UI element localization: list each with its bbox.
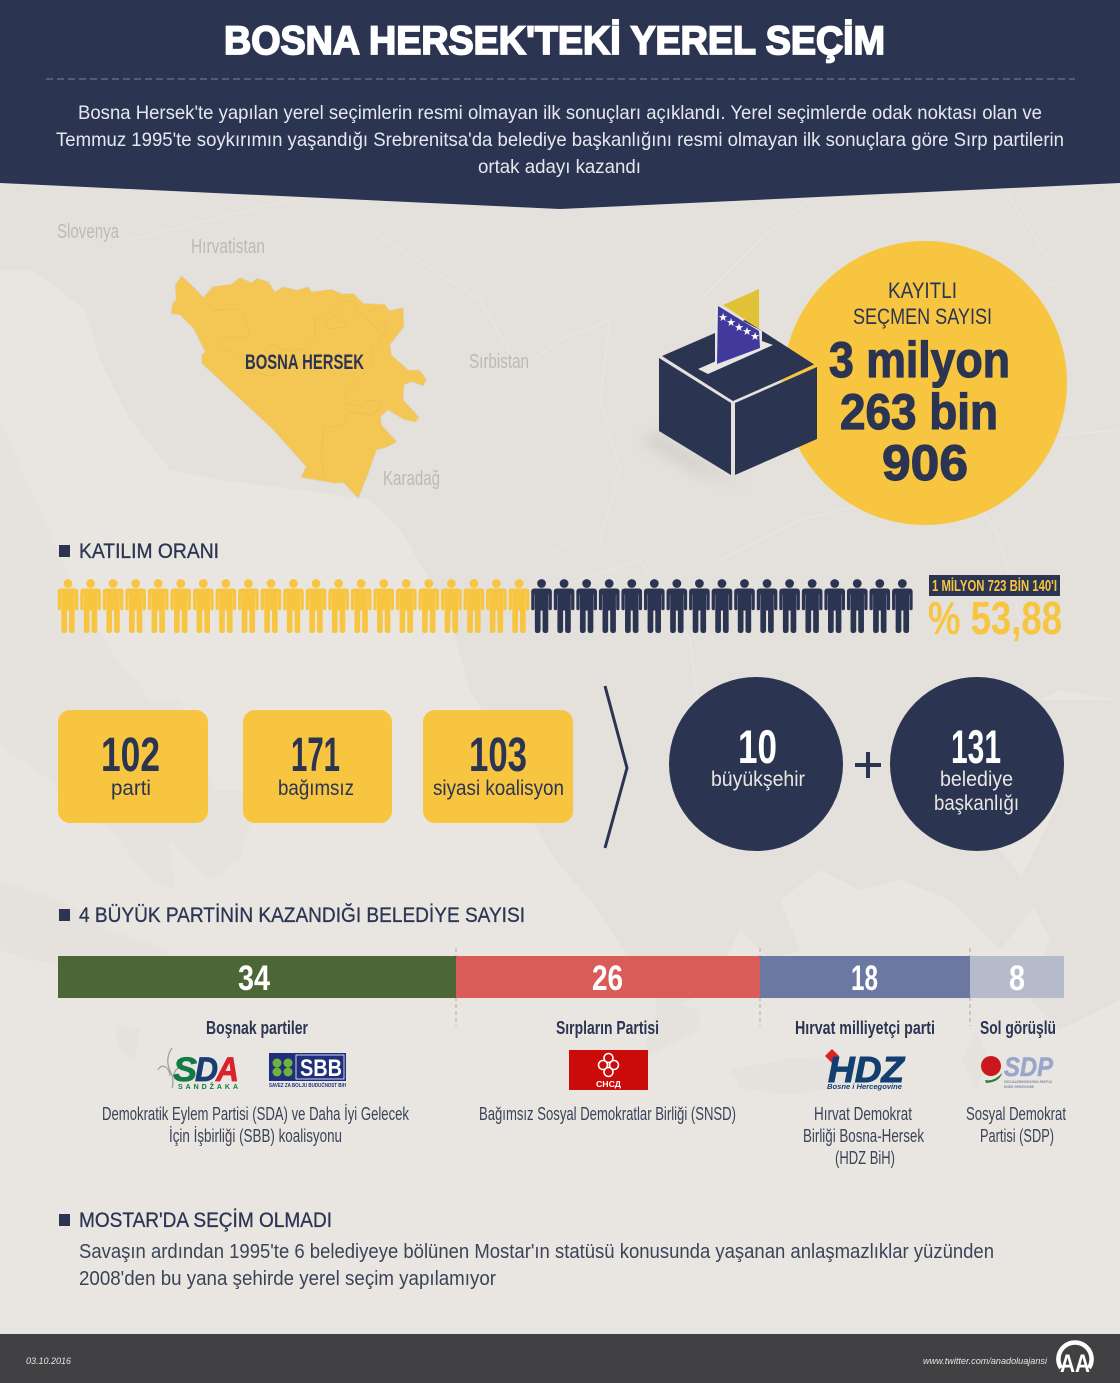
logo: SNSD (569, 1050, 648, 1090)
footer (0, 1334, 1120, 1383)
icon: ballot box: ★ (726, 316, 736, 329)
intro text: Bosna Hersek'te yapılan yerel seçimlerin resmi olmayan ilk sonuçları açıklandı. Yerel seçimlerde odak noktası olan ve (78, 102, 1042, 124)
registered voters circle: 263 bin (840, 384, 998, 440)
logo: SBB (269, 1053, 346, 1089)
logo: SNSD: СНСД (596, 1079, 621, 1089)
registered voters circle: 906 (882, 435, 968, 491)
intro text (56, 102, 1064, 178)
heading: four big parties: 4 BÜYÜK PARTİNİN KAZANDIĞI BELEDİYE SAYISI (79, 904, 525, 927)
logo: SBB: SAVEZ ZA BOLJU BUDUĆNOST BIH (269, 1081, 346, 1089)
party descriptions: Birliği Bosna-Hersek (803, 1126, 925, 1146)
logo: SDP: SDP (1004, 1052, 1054, 1082)
icon: ballot box (640, 289, 817, 488)
registered voters circle: SEÇMEN SAYISI (853, 304, 992, 329)
icon: plus (855, 752, 881, 778)
arrow: chevron (605, 686, 627, 848)
section: Mostar: MOSTAR'DA SEÇİM OLMADI (79, 1209, 332, 1232)
logo: AA: AA (1060, 1350, 1090, 1378)
registered voters circle: KAYITLI (888, 278, 957, 303)
logo: SDA (158, 1048, 239, 1091)
card: parties: parti (111, 777, 151, 800)
card: parties: 102 (101, 729, 160, 782)
card: independents: bağımsız (278, 777, 354, 800)
icon: ballot box: ★ (734, 321, 744, 334)
circle: metropolitan: büyükşehir (711, 768, 805, 791)
neighbour country labels (57, 221, 529, 490)
card: independents: 171 (291, 729, 340, 782)
circle: municipalities: 131 (951, 720, 1001, 773)
pictogram: turnout people (58, 579, 913, 633)
party group headings (206, 1018, 1056, 1038)
registered voters circle (783, 241, 1067, 525)
card: independents (243, 710, 392, 823)
stacked bar chart: 26 (592, 959, 623, 998)
circle: metropolitan: 10 (738, 720, 777, 773)
icon: ballot box: ★ (750, 330, 760, 343)
neighbour country labels: Slovenya (57, 221, 120, 243)
circle: municipalities: başkanlığı (934, 792, 1019, 815)
stacked bar chart: 18 (851, 959, 878, 998)
map label: BOSNA HERSEK (245, 351, 364, 374)
party descriptions (102, 1104, 1066, 1168)
stacked bar chart: 34 (238, 959, 270, 998)
heading: turnout: KATILIM ORANI (79, 540, 219, 563)
card: parties (58, 710, 208, 823)
party descriptions: Partisi (SDP) (980, 1126, 1054, 1146)
section: Mostar: Savaşın ardından 1995'te 6 belediyeye bölünen Mostar'ın statüsü konusunda yaşanan anlaşmazlıklar yüzünden (79, 1241, 994, 1263)
party group headings: Sol görüşlü (980, 1018, 1056, 1038)
stacked bar chart (58, 948, 1064, 1026)
logo: HDZ: Bosne i Hercegovine (827, 1082, 902, 1091)
turnout figure: % 53,88 (928, 592, 1062, 644)
circle: municipalities (890, 677, 1064, 851)
section: Mostar (59, 1209, 994, 1290)
logo: SDP: SOCIJALDEMOKRATSKA PARTIJA (1004, 1079, 1052, 1084)
logo: SBB: SBB (300, 1055, 342, 1082)
logo: SDA: A (215, 1051, 239, 1089)
logo: AA (1058, 1342, 1092, 1378)
turnout figure: 1 MİLYON 723 BİN 140'I (932, 577, 1057, 595)
party descriptions: Demokratik Eylem Partisi (SDA) ve Daha İyi Gelecek (102, 1104, 410, 1124)
circle: municipalities: belediye (940, 768, 1013, 791)
neighbour country labels: Sırbistan (469, 351, 529, 373)
footer: 03.10.2016 (26, 1356, 71, 1366)
logo: SDA: D (195, 1051, 218, 1089)
neighbour country labels: Hırvatistan (191, 236, 265, 258)
registered voters circle: 3 milyon (829, 332, 1010, 388)
party descriptions: Sosyal Demokrat (966, 1104, 1066, 1124)
intro text: ortak adayı kazandı (478, 156, 641, 178)
logo: HDZ: HDZ (828, 1049, 906, 1090)
logo: SDA: SANDŽAKA (178, 1082, 238, 1091)
stacked bar chart: 8 (1009, 959, 1025, 998)
footer: www.twitter.com/anadoluajansi (923, 1356, 1048, 1367)
party group headings: Sırpların Partisi (556, 1018, 659, 1038)
turnout figure (928, 575, 1062, 644)
neighbour country labels: Karadağ (383, 468, 440, 490)
card: coalitions (423, 710, 573, 823)
section: Mostar: 2008'den bu yana şehirde yerel seçim yapılamıyor (79, 1268, 496, 1290)
header band (0, 0, 1120, 209)
icon: ballot box: ★ (718, 311, 728, 324)
card: coalitions: 103 (469, 729, 527, 782)
party group headings: Boşnak partiler (206, 1018, 308, 1038)
card: coalitions: siyasi koalisyon (433, 777, 564, 800)
party descriptions: (HDZ BiH) (835, 1148, 895, 1168)
map: Bosnia and Herzegovina (171, 276, 427, 498)
icon: ballot box: ★ (742, 325, 752, 338)
party descriptions: Bağımsız Sosyal Demokratlar Birliği (SNSD) (479, 1104, 736, 1124)
logo: SDP: BOSNE I HERCEGOVINE (1004, 1084, 1034, 1089)
title: BOSNA HERSEK'TEKİ YEREL SEÇİM (224, 19, 885, 63)
party group headings: Hırvat milliyetçi parti (795, 1018, 935, 1038)
logo: SDP (981, 1052, 1054, 1089)
circle: metropolitan (669, 677, 843, 851)
party descriptions: Hırvat Demokrat (814, 1104, 912, 1124)
intro text: Temmuz 1995'te soykırımın yaşandığı Srebrenitsa'da belediye başkanlığını resmi olmayan ilk sonuçlara göre Sırp partilerin (56, 129, 1064, 151)
party descriptions: İçin İşbirliği (SBB) koalisyonu (169, 1126, 342, 1146)
logo: SDA: S (173, 1051, 197, 1089)
